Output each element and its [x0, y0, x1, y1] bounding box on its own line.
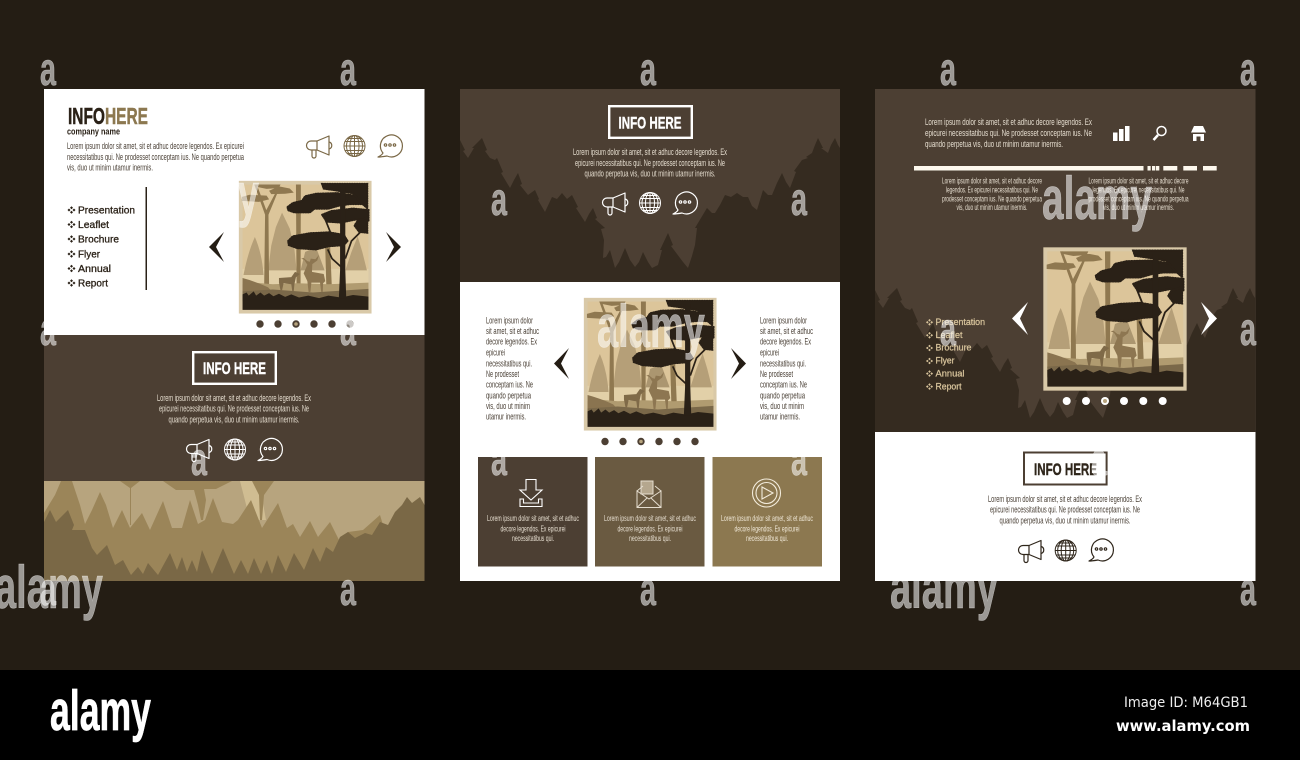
info here box: INFO HERE: [618, 114, 682, 132]
arrow left: [209, 232, 224, 262]
info text: quando perpetua vis, duo ut minim utamur inermis.: [168, 414, 300, 424]
panel: brochure two: [460, 89, 840, 581]
menu list: Annual: [78, 263, 111, 275]
icon: megaphone: [603, 193, 628, 215]
info text: [988, 494, 1142, 526]
text block left: prodesset conceptam ius. Ne quando perpetua: [942, 194, 1042, 204]
menu divider: [146, 187, 147, 290]
stock watermarks: a: [1091, 433, 1107, 485]
icon: bar chart: [1113, 126, 1130, 141]
card text: necessitatibus qui.: [629, 533, 671, 543]
panel: brochure one: [44, 89, 424, 581]
icon: speech bubble: [378, 135, 402, 157]
icon: home: [1191, 126, 1206, 141]
intro text: [925, 117, 1092, 149]
panel: brochure three: [875, 89, 1256, 581]
icon: globe: [224, 439, 246, 460]
menu list: Flyer: [78, 248, 100, 260]
card text: [721, 513, 813, 543]
intro text: Lorem ipsum dolor sit amet, sit et adhuc decore legendos. Ex epicurei: [67, 141, 244, 151]
card text: Lorem ipsum dolor sit amet, sit et adhuc: [487, 513, 579, 523]
icon: search: [1154, 126, 1166, 140]
icon: megaphone: [1019, 540, 1044, 562]
carousel dots: [1063, 397, 1167, 405]
menu list: [78, 204, 135, 290]
menu list: Brochure: [936, 343, 972, 353]
stock watermarks: a: [1240, 563, 1256, 615]
card text: decore legendos. Ex epicurei: [618, 524, 683, 534]
stock watermarks: a: [940, 43, 956, 95]
dark info section: [44, 335, 424, 481]
icon: globe: [344, 136, 365, 156]
text block right: legendos. Ex epicurei necessitatibus qui. Ne: [1092, 186, 1185, 194]
card text: [604, 513, 696, 543]
info text: epicurei necessitatibus qui. Ne prodesset conceptam ius. Ne: [159, 404, 309, 414]
stock watermarks: a: [191, 433, 207, 485]
intro text: quando perpetua vis, duo ut minim utamur inermis.: [925, 139, 1063, 149]
card text: decore legendos. Ex epicurei: [734, 524, 800, 534]
card text: Lorem ipsum dolor sit amet, sit et adhuc: [604, 513, 696, 523]
text block right: Lorem ipsum dolor sit amet, sit et adhuc decore: [1088, 176, 1189, 186]
stock watermarks: a: [40, 303, 56, 355]
dashed divider: [914, 166, 1217, 170]
info text: quando perpetua vis, duo ut minim utamur inermis.: [1000, 516, 1130, 526]
menu bullets: [926, 319, 933, 390]
dark header with forest: [460, 89, 840, 282]
stock watermarks: a: [491, 433, 507, 485]
white header section: [44, 89, 424, 335]
icon: megaphone: [307, 136, 332, 158]
left text column: [486, 316, 539, 422]
carousel dots: [601, 438, 699, 445]
arrow left: [1012, 302, 1028, 335]
left text column: Lorem ipsum dolor: [486, 316, 533, 326]
picture: deer in forest: [239, 181, 372, 314]
card text: [487, 513, 579, 543]
icon: speech bubble: [673, 192, 697, 214]
left text column: vis, duo ut minim: [486, 401, 530, 411]
text block left: vis, duo ut minim utamur inermis.: [956, 203, 1028, 212]
stock watermarks: alamy: [597, 293, 705, 360]
icon: globe: [640, 192, 660, 214]
menu list: Flyer: [936, 356, 955, 366]
website: www.alamy.com: [1116, 717, 1250, 735]
left text column: decore legendos. Ex: [486, 337, 537, 347]
arrow right: [386, 232, 401, 262]
title: INFOHERE: [68, 103, 148, 129]
arrow left: [554, 348, 569, 379]
white info section: [875, 432, 1256, 581]
forest illustration: [44, 481, 424, 581]
stock watermarks: a: [791, 433, 807, 485]
white content section: [460, 282, 840, 581]
card: video: [712, 457, 822, 566]
icon: play: [752, 479, 780, 507]
right text column: Lorem ipsum dolor: [760, 316, 807, 326]
card: mail: [595, 457, 704, 566]
left text column: epicurei: [486, 348, 505, 358]
text block left: Lorem ipsum dolor sit amet, sit et adhuc decore: [942, 176, 1042, 186]
info here box: [609, 106, 692, 138]
right text column: epicurei: [760, 348, 779, 358]
footer logo: alamy: [50, 679, 151, 743]
text block left: [942, 176, 1042, 212]
right text column: vis, duo ut minim: [760, 401, 804, 411]
icon: download: [520, 480, 542, 506]
stock watermarks: [0, 43, 1256, 621]
stock watermarks: a: [340, 43, 356, 95]
intro text: vis, duo ut minim utamur inermis.: [67, 162, 153, 172]
stock watermarks: a: [40, 563, 56, 615]
image id: Image ID: M64GB1: [1124, 695, 1248, 711]
left text column: Ne prodesset: [486, 369, 519, 379]
carousel dots: [256, 320, 354, 328]
info text: [157, 393, 311, 424]
menu list: Presentation: [78, 204, 135, 216]
intro text: epicurei necessitatibus qui. Ne prodesset conceptam ius. Ne: [925, 128, 1092, 138]
stock watermarks: a: [340, 303, 356, 355]
info text: Lorem ipsum dolor sit amet, sit et adhuc decore legendos. Ex: [157, 393, 311, 403]
intro text: [67, 141, 245, 172]
dark header with forest: [875, 89, 1256, 432]
text block left: legendos. Ex epicurei necessitatibus qui. Ne: [946, 186, 1038, 194]
icon: envelope: [637, 481, 661, 508]
left text column: utamur inermis.: [486, 412, 526, 422]
left text column: sit amet, sit et adhuc: [486, 326, 539, 336]
text block right: prodesset conceptam ius. Ne quando perpetua: [1088, 194, 1189, 204]
card text: decore legendos. Ex epicurei: [500, 524, 566, 534]
menu list: Presentation: [936, 317, 985, 327]
stock watermarks: a: [640, 43, 656, 95]
intro text: necessitatibus qui. Ne prodesset conceptam ius. Ne quando perpetua: [67, 152, 245, 162]
info text: [573, 147, 727, 178]
left text column: quando perpetua: [486, 390, 532, 400]
icon: globe: [1055, 540, 1076, 561]
right text column: decore legendos. Ex: [760, 337, 811, 347]
info here box: [1024, 452, 1107, 484]
stock watermarks: a: [1240, 303, 1256, 355]
menu list: Report: [78, 278, 108, 290]
info text: Lorem ipsum dolor sit amet, sit et adhuc decore legendos. Ex: [573, 147, 727, 157]
footer bar: [0, 670, 1300, 760]
menu list: Brochure: [78, 234, 119, 246]
card: download: [478, 457, 588, 566]
right text column: Ne prodesset: [760, 369, 793, 379]
info here box: [193, 352, 276, 384]
picture: deer in forest: [1043, 247, 1187, 391]
menu list: Report: [936, 381, 962, 391]
text block right: [1088, 176, 1189, 212]
picture: deer in forest: [584, 298, 717, 431]
stock watermarks: a: [1240, 43, 1256, 95]
info text: epicurei necessitatibus qui. Ne prodesset conceptam ius. Ne: [990, 504, 1140, 514]
stock watermarks: alamy: [1042, 165, 1152, 232]
menu list: [936, 317, 985, 391]
stock watermarks: a: [940, 303, 956, 355]
stock watermarks: a: [640, 563, 656, 615]
info text: Lorem ipsum dolor sit amet, sit et adhuc decore legendos. Ex: [988, 494, 1142, 504]
right text column: quando perpetua: [760, 390, 806, 400]
left text column: conceptam ius. Ne: [486, 380, 533, 390]
stock watermarks: a: [791, 173, 807, 225]
right text column: sit amet, sit et adhuc: [760, 326, 813, 336]
arrow right: [1201, 302, 1217, 335]
menu list: Leaflet: [936, 330, 963, 340]
stock watermarks: alamy: [890, 554, 998, 621]
menu list: Annual: [936, 368, 964, 378]
icon: speech bubble: [258, 438, 282, 460]
intro text: Lorem ipsum dolor sit amet, sit et adhuc decore legendos. Ex: [925, 117, 1092, 127]
company name: company name: [67, 126, 120, 138]
info here box: INFO HERE: [203, 359, 266, 378]
stock watermarks: alamy: [0, 554, 103, 621]
left text column: necessitatibus qui.: [486, 358, 532, 368]
info text: quando perpetua vis, duo ut minim utamur inermis.: [584, 168, 716, 178]
card text: necessitatibus qui.: [512, 533, 554, 543]
stock watermarks: alamy: [150, 161, 259, 228]
icon: speech bubble: [1089, 539, 1113, 561]
right text column: necessitatibus qui.: [760, 358, 806, 368]
right text column: [760, 316, 813, 422]
info here box: INFO HERE: [1034, 460, 1097, 479]
right text column: conceptam ius. Ne: [760, 380, 807, 390]
stock watermarks: a: [340, 563, 356, 615]
right text column: utamur inermis.: [760, 412, 800, 422]
card text: Lorem ipsum dolor sit amet, sit et adhuc: [721, 513, 813, 523]
card text: necessitatibus qui.: [746, 533, 788, 543]
stock watermarks: a: [491, 173, 507, 225]
menu bullets: [68, 206, 76, 287]
menu list: Leaflet: [78, 219, 109, 231]
info text: epicurei necessitatibus qui. Ne prodesset conceptam ius. Ne: [575, 158, 725, 168]
text block right: vis, duo ut minim utamur inermis.: [1103, 203, 1174, 212]
icon: megaphone: [187, 440, 212, 462]
arrow right: [731, 348, 746, 379]
stock watermarks: a: [40, 43, 56, 95]
